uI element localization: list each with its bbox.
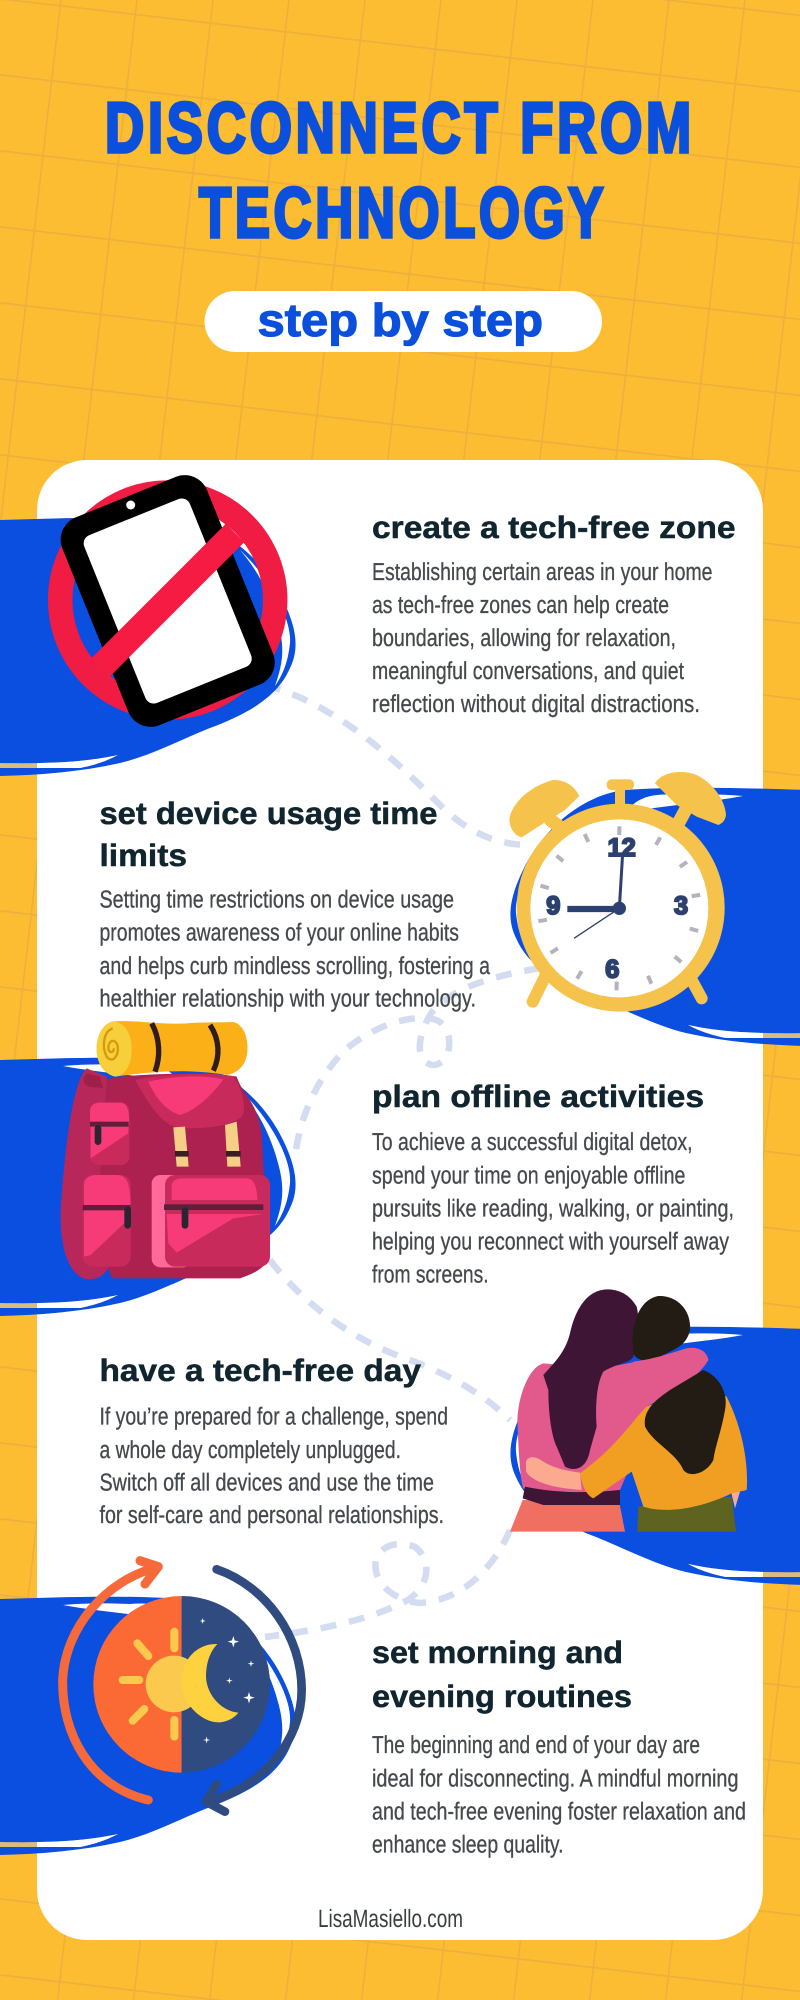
blue brush stroke 5 (0, 1597, 296, 1855)
white content panel (37, 460, 763, 1940)
heading: create a tech-free zone: create a tech-free zone (372, 510, 736, 545)
text: tech-free day: If you’re prepared for a challenge, spend (100, 1404, 448, 1431)
text: offline activities: from screens. (372, 1262, 489, 1289)
heading: set device usage time limits (100, 796, 438, 873)
heading: set device usage time limits: limits (100, 838, 187, 873)
text: tech-free zone: as tech-free zones can help create (372, 592, 669, 619)
icon: alarm clock: 6 (605, 955, 619, 983)
icon: day and night (63, 1561, 302, 1812)
text: tech-free zone: reflection without digital distractions. (372, 691, 700, 718)
heading: set morning and evening routines: set morning and (372, 1635, 623, 1670)
text: offline activities: spend your time on enjoyable offline (372, 1163, 685, 1190)
subtitle pill: step by step (258, 294, 543, 346)
text: tech-free zone: Establishing certain areas in your home (372, 559, 712, 586)
icon: backpack (61, 1021, 270, 1279)
text: offline activities (372, 1129, 734, 1289)
text: device limits: healthier relationship with your technology. (100, 986, 476, 1012)
dashed connector path (265, 685, 540, 1637)
blue brush stroke 3 (0, 1058, 296, 1316)
heading: set morning and evening routines (372, 1635, 632, 1714)
text: routines: The beginning and end of your day are (372, 1732, 700, 1759)
footer credit: LisaMasiello.com (318, 1905, 463, 1933)
icon: alarm clock: 12 (608, 833, 636, 862)
title (105, 89, 695, 253)
heading: plan offline activities: plan offline activities (372, 1079, 704, 1114)
text: device limits (100, 886, 490, 1012)
text: device limits: and helps curb mindless scrolling, fostering a (100, 953, 490, 980)
title: TECHNOLOGY (199, 174, 607, 253)
subtitle pill (204, 291, 602, 352)
text: tech-free zone: meaningful conversations, and quiet (372, 658, 684, 685)
blue brush stroke 2 (510, 788, 800, 1046)
text: device limits: Setting time restrictions on device usage (100, 886, 454, 914)
text: routines: enhance sleep quality. (372, 1831, 564, 1858)
blue brush stroke 4 (510, 1327, 800, 1585)
text: tech-free day (100, 1404, 448, 1529)
text: tech-free zone: boundaries, allowing for relaxation, (372, 625, 676, 652)
text: offline activities: To achieve a successful digital detox, (372, 1129, 693, 1156)
heading: set device usage time limits: set device usage time (100, 796, 438, 831)
text: routines (372, 1732, 746, 1858)
text: device limits: promotes awareness of your online habits (100, 920, 459, 947)
icon: alarm clock: 3 (674, 891, 688, 920)
icon: alarm clock (509, 772, 726, 1012)
blue brush stroke 1 (0, 518, 296, 776)
icon: hugging couple (510, 1289, 747, 1532)
text: tech-free day: a whole day completely unplugged. (100, 1437, 401, 1464)
text: tech-free day: for self-care and personal relationships. (100, 1502, 444, 1529)
heading: set morning and evening routines: evening routines (372, 1679, 632, 1714)
text: tech-free day: Switch off all devices and use the time (100, 1470, 434, 1496)
icon: no phone (53, 468, 282, 734)
text: tech-free zone (372, 559, 712, 718)
icon: alarm clock: 9 (546, 891, 560, 920)
heading: have a tech-free day: have a tech-free day (100, 1353, 422, 1388)
